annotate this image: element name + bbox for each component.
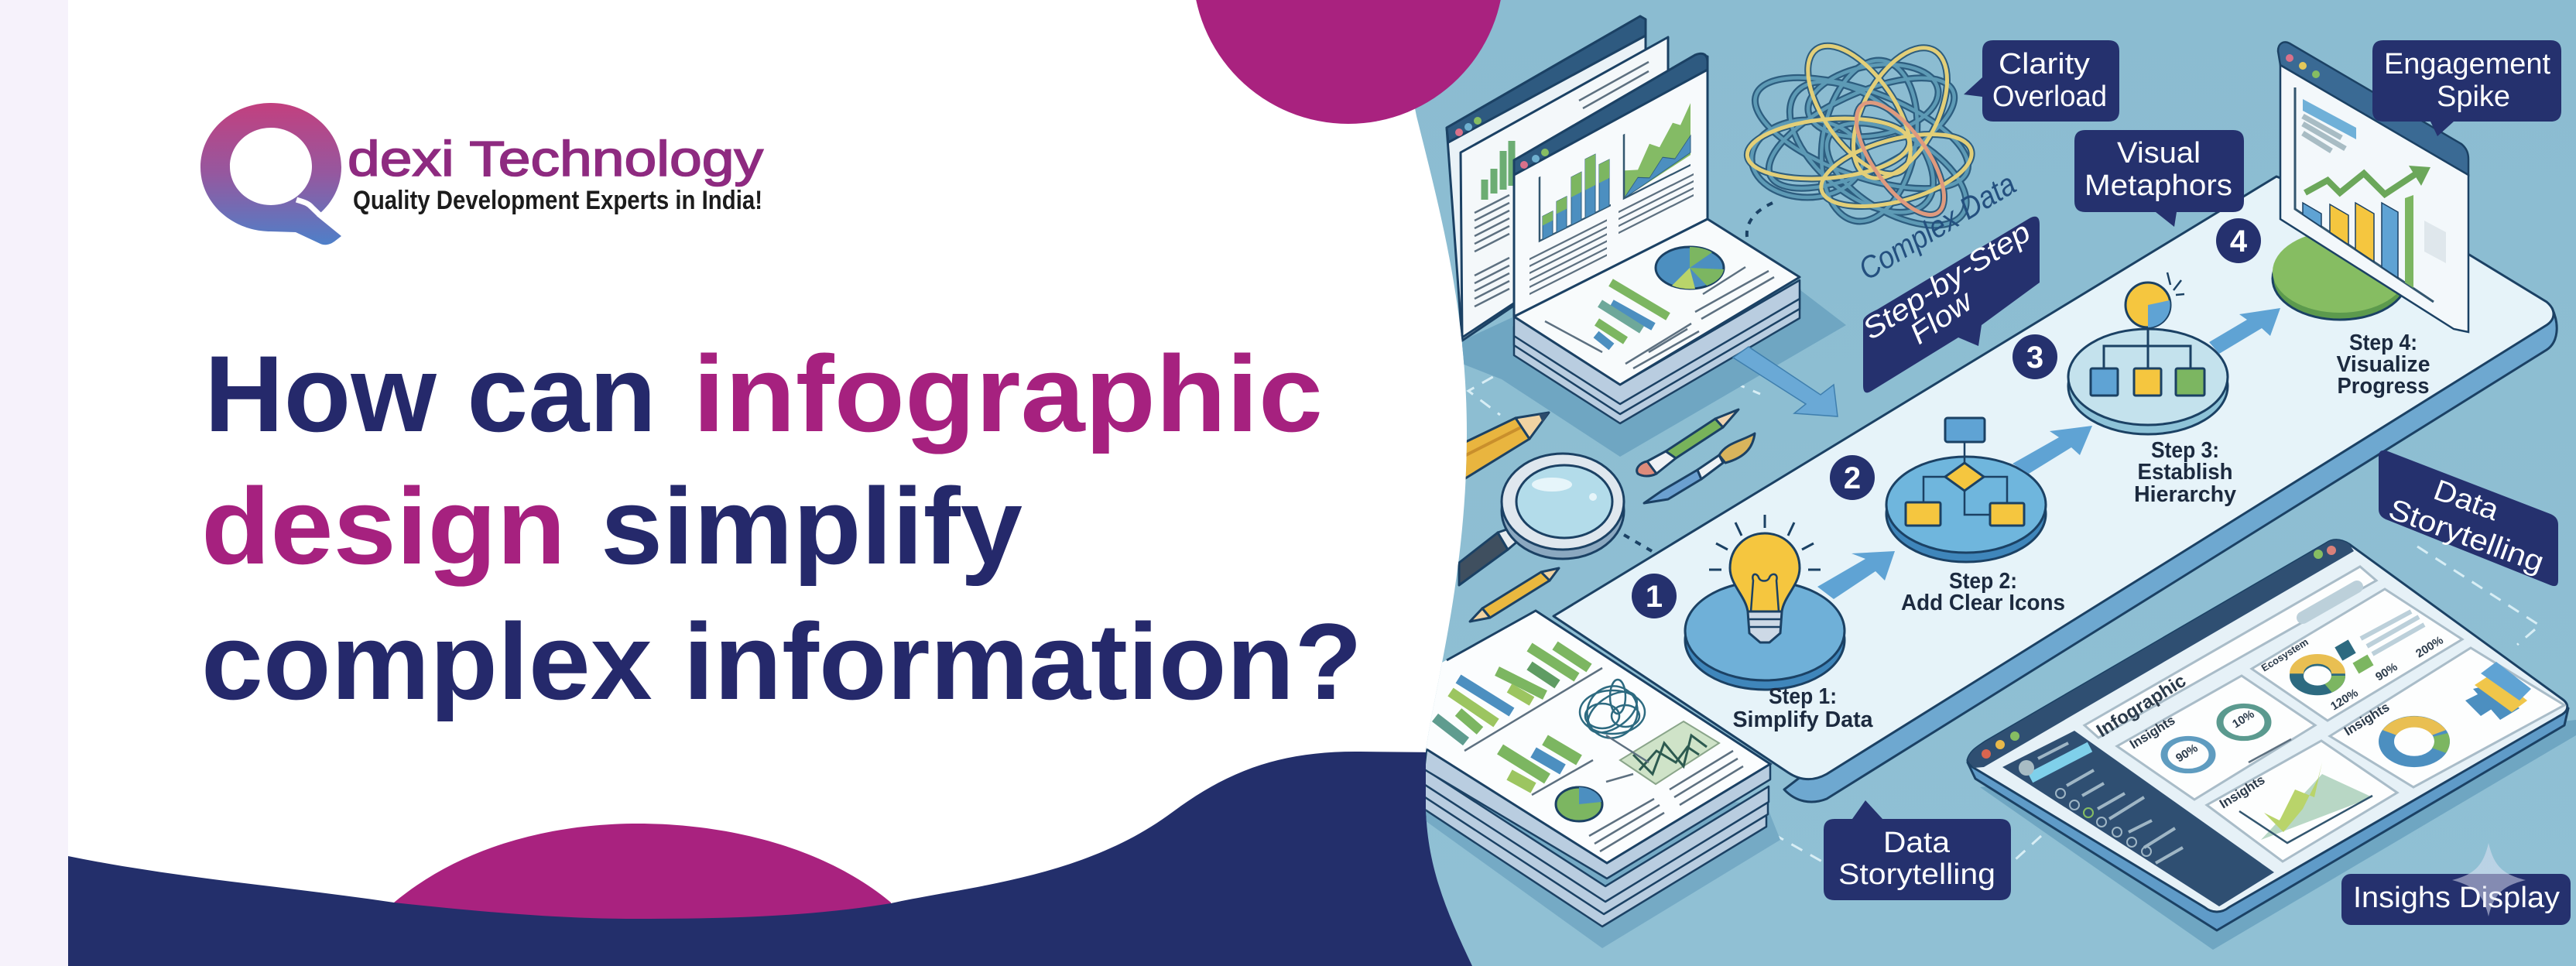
tablet insights donut card: [2330, 648, 2564, 787]
step 4 label: Step 4:: [2349, 331, 2417, 355]
tools: yellow pencil: [1470, 568, 1559, 622]
green disk: [2273, 231, 2407, 320]
callout: Engagement Spike: Engagement: [2384, 48, 2550, 80]
tablet donut card: 200%: [2413, 634, 2446, 660]
pie chart: [1656, 247, 1724, 289]
title: design: [201, 465, 566, 587]
lower page line chart: [1620, 721, 1719, 784]
logo: [200, 103, 763, 245]
step 3 label: Step 3:: [2151, 438, 2219, 463]
navy wave: [68, 752, 1517, 966]
tablet insights rings card: 10%: [2230, 707, 2257, 731]
title: simplify: [601, 465, 1023, 587]
callout: Step-by-Step Flow: [1857, 216, 2040, 392]
step 4: [2216, 42, 2468, 399]
arrow: step 2 to 3: [2012, 426, 2092, 474]
step 4 label: Progress: [2338, 374, 2429, 399]
step 4 badge: [2216, 218, 2261, 263]
step 3 label: Establish: [2138, 460, 2232, 485]
title: [201, 333, 1362, 722]
sparkle watermark: [2452, 843, 2526, 916]
step 4 label: [2336, 331, 2430, 399]
step 4 label: Visualize: [2336, 352, 2430, 377]
dashboard tablet: [1968, 540, 2576, 950]
callout: Insights Display: [2341, 874, 2571, 925]
step 1 label: Step 1:: [1769, 684, 1837, 709]
callout: Visual Metaphors: [2074, 130, 2244, 227]
tablet insights rings card: [2117, 676, 2315, 800]
tablet donut card: [2252, 589, 2462, 721]
lower page tangle: [1577, 677, 1647, 747]
lower page: [1427, 611, 1770, 863]
callout: Data Storytelling bottom: [1824, 800, 2011, 900]
callout: Data Storytelling rotated: [2379, 450, 2558, 586]
step 2 badge: 2: [1844, 461, 1861, 495]
tools: marker: [1637, 409, 1738, 476]
tablet body: [1968, 540, 2567, 912]
callout: Visual Metaphors: Metaphors: [2084, 170, 2232, 202]
platform side: [1784, 308, 2557, 802]
lower page pie: [1556, 787, 1602, 821]
monitor: [2278, 42, 2468, 332]
tablet insights line card: [2207, 741, 2397, 862]
monitor line chart: [2305, 172, 2419, 194]
callout: Clarity Overload: Clarity: [1999, 48, 2090, 80]
tools: brush: [1644, 433, 1755, 503]
step 1 badge: [1632, 574, 1677, 618]
step 1 badge: 1: [1646, 580, 1663, 614]
arrow: data to steps: [1733, 347, 1838, 416]
tangled complex data icon: [1743, 42, 1975, 229]
pink hill: [394, 824, 891, 929]
step 1 label: [1732, 684, 1873, 732]
callout: Data Storytelling rotated: Storytelling: [2384, 493, 2548, 579]
dotted connectors: [1624, 201, 1776, 551]
callout: Data Storytelling bottom: Storytelling: [1838, 858, 1995, 891]
title: How can: [204, 333, 656, 454]
monitor title bar: [2278, 42, 2468, 175]
tablet header card: [2084, 567, 2376, 742]
flowchart icon: [1906, 418, 2024, 526]
tablet insights rings card: Insights: [2127, 713, 2177, 752]
platform top: [1553, 176, 2554, 779]
front page bar chart: [1530, 99, 1694, 294]
tablet donut card: 120%: [2328, 687, 2361, 713]
tablet insights donut card: Insights: [2341, 700, 2392, 738]
tablet title bar: [1968, 540, 2354, 768]
callout: Insights Display: Insighs Display: [2353, 882, 2560, 914]
tangle coloured strands: [1749, 59, 1970, 228]
step 3: [2012, 272, 2280, 507]
callout: Engagement Spike: Spike: [2437, 80, 2510, 113]
dashed connector lines: [1468, 366, 2540, 862]
step 2 disk: [1886, 457, 2046, 562]
callout: Data Storytelling bottom: Data: [1883, 827, 1951, 859]
back window: [1447, 16, 1646, 341]
step 3 label: [2134, 438, 2236, 507]
callout: Data Storytelling rotated: Data: [2430, 474, 2504, 527]
label: Complex Data: Complex Data: [1853, 167, 2022, 287]
white panel: [68, 0, 1539, 966]
arrow: step 3 to 4: [2209, 308, 2280, 354]
step 1: [1632, 515, 1895, 732]
logo mark Q: [200, 103, 341, 245]
tangle yellow and salmon strands: [1745, 43, 1974, 217]
tablet sidebar: [2002, 731, 2274, 906]
lower paper layers: [1423, 749, 1770, 927]
callout: Clarity Overload: Overload: [1992, 80, 2107, 113]
monitor bars: [2303, 203, 2321, 227]
front page area chart: [1624, 103, 1690, 198]
stack shadow: [1462, 283, 1846, 457]
monitor glass: [2280, 65, 2468, 332]
step 4 badge: 4: [2230, 224, 2248, 259]
blue illustration background: [1393, 0, 2576, 966]
callout: Clarity Overload: [1964, 40, 2119, 122]
tablet donut card: 90%: [2373, 660, 2400, 683]
logo tagline: Quality Development Experts in India!: [353, 186, 762, 215]
step 2 badge: [1830, 455, 1875, 500]
tablet insights rings card: 90%: [2174, 742, 2201, 765]
arrow: step 1 to 2: [1817, 551, 1895, 599]
horizontal bars: [1596, 283, 1668, 347]
tablet shadow: [1980, 720, 2576, 950]
tangle dark outline: [1743, 42, 1975, 229]
middle page: [1461, 37, 1668, 337]
step 1 label: Simplify Data: [1732, 707, 1873, 732]
horizontal page: [1514, 219, 1800, 385]
step 2 label: Step 2:: [1949, 569, 2017, 594]
left margin strip: [0, 0, 68, 966]
tools: pencil: [1459, 413, 1549, 482]
lower document stack: [1423, 611, 1780, 948]
icon: magnifying glass: [1459, 454, 1624, 585]
tablet header card: Infographic: [2093, 670, 2190, 742]
step 3 disk: [2068, 329, 2228, 434]
tablet insights line card: Insights: [2217, 772, 2267, 811]
paper stack layers: [1514, 280, 1800, 423]
step 3 badge: [2012, 334, 2057, 379]
step 3 badge: 3: [2026, 341, 2043, 375]
callout: Step-by-Step Flow: Flow: [1904, 284, 1981, 351]
main platform: [1553, 176, 2557, 802]
hierarchy icon: [2091, 272, 2204, 396]
title: infographic: [693, 333, 1323, 454]
callout: Visual Metaphors: Visual: [2117, 137, 2201, 170]
callout: Step-by-Step Flow: Step-by-Step: [1857, 216, 2036, 347]
step 3 label: Hierarchy: [2134, 482, 2236, 507]
icon: light bulb: [1709, 515, 1821, 642]
step 1 disk: [1685, 581, 1845, 690]
step 2 label: [1901, 573, 2064, 610]
purple top circle: [1193, 0, 1504, 124]
step 2: [1830, 418, 2092, 615]
lower stack shadow: [1425, 774, 1780, 948]
title: complex information?: [201, 601, 1362, 722]
lower page bars: [1435, 646, 1589, 742]
callout: Engagement Spike: [2372, 40, 2561, 136]
lower page card bars: [1500, 740, 1579, 788]
front upright page: [1514, 53, 1708, 317]
step 2 label: Add Clear Icons: [1901, 591, 2065, 615]
upper document stack: [1447, 16, 1846, 457]
tablet donut card: Ecosystem: [2259, 635, 2311, 674]
logo wordmark: dexi Technology: [348, 131, 763, 187]
tablet edge: [1968, 708, 2568, 930]
